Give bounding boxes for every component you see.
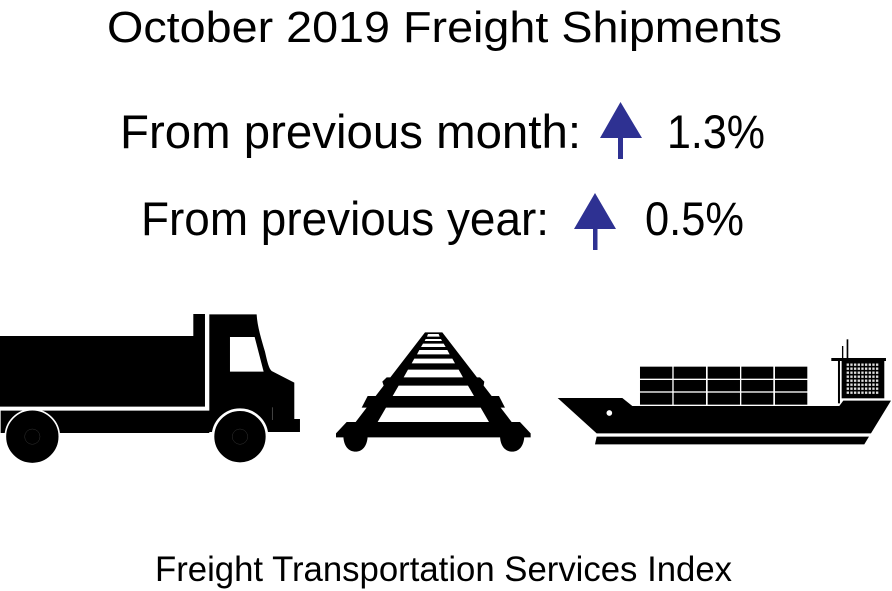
containers <box>640 367 807 405</box>
hull <box>558 398 891 433</box>
porthole <box>606 410 612 416</box>
bridge tower <box>831 339 886 403</box>
keel stripe <box>595 437 869 444</box>
value: month change: 1.3% <box>667 105 765 158</box>
text: from previous month label: From previous month: <box>120 105 581 158</box>
title: October 2019 Freight Shipments <box>107 3 782 52</box>
footer caption: Freight Transportation Services Index <box>155 550 732 589</box>
icon: up arrow month <box>600 102 642 159</box>
icon: truck <box>0 314 300 464</box>
value: year change: 0.5% <box>645 192 744 245</box>
text: from previous year label: From previous year: <box>141 192 549 245</box>
icon: container ship <box>558 339 891 444</box>
icon: railroad track <box>336 332 531 452</box>
icon: up arrow year <box>574 193 616 250</box>
